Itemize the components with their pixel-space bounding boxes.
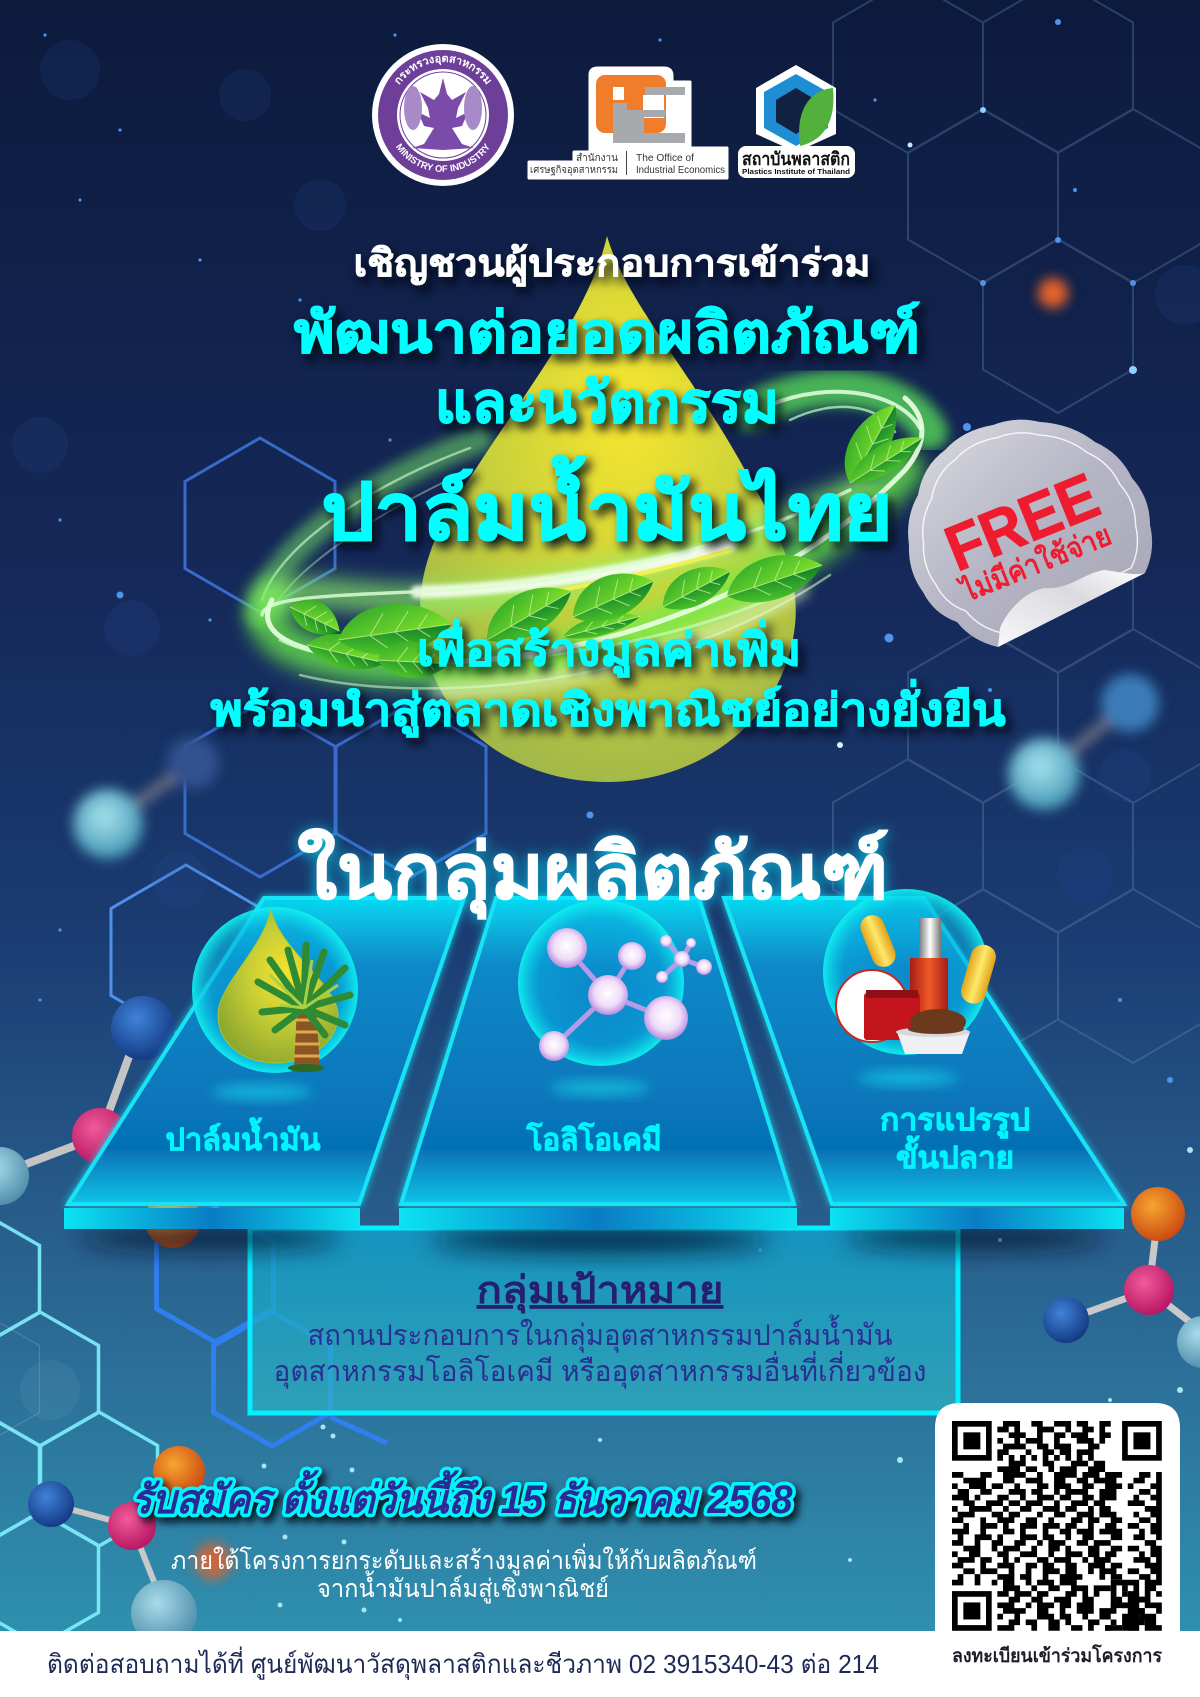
molecule left: [0, 996, 201, 1248]
QR caption: ลงทะเบียนเข้าร่วมโครงการ: [952, 1644, 1163, 1667]
title text: ปาล์มน้ำมันไทย: [322, 455, 892, 556]
label: end products: [880, 1104, 1030, 1175]
logo: Plastics Institute of Thailand: สถาบันพลาสติก: [742, 149, 850, 169]
QR code card: [935, 1403, 1180, 1631]
panel shadows: [80, 1228, 1105, 1252]
bubble: [823, 889, 989, 1055]
title text: พร้อมนำสู่ตลาดเชิงพาณิชย์อย่างยั่งยืน: [210, 679, 1005, 737]
green swirl front bands: [262, 398, 922, 690]
logo: Ministry of Industry: กระทรวงอุตสาหกรรม: [395, 56, 492, 85]
bubble: [518, 900, 684, 1066]
project note: ภายใต้โครงการยกระดับและสร้างมูลค่าเพิ่มให้กับผลิตภัณฑ์: [171, 1543, 757, 1576]
molecule right: [1043, 1187, 1200, 1368]
panel: end products: [724, 889, 1124, 1229]
product group heading: ในกลุ่มผลิตภัณฑ์: [298, 828, 888, 920]
target group heading: กลุ่มเป้าหมาย: [476, 1270, 724, 1314]
QR code: [952, 1424, 1162, 1628]
footer bar: [0, 1631, 1200, 1697]
label: end products: การแปรรูป: [880, 1104, 1030, 1139]
registration date: รับสมัคร ตั้งแต่วันนี้ถึง 15 ธันวาคม 2568: [132, 1469, 793, 1522]
logo: Ministry of Industry: MINISTRY OF INDUSTRY: [396, 142, 489, 172]
title text: [210, 243, 1005, 737]
logo: Office of Industrial Economics: สำนักงาน: [576, 153, 618, 164]
title text: และนวัตกรรม: [435, 371, 779, 434]
FREE badge: [908, 420, 1152, 647]
panel: palm oil: [64, 898, 464, 1229]
logo: Office of Industrial Economics: The Office of: [636, 153, 694, 164]
target group panel: [250, 1228, 958, 1413]
leaves: [284, 394, 928, 679]
molecule bottom left: [28, 1446, 205, 1646]
label: oleochemical: โอลิโอเคมี: [526, 1121, 662, 1157]
blurred molecules upper area: [73, 278, 1159, 1579]
logo: Office of Industrial Economics: Industrial Economics: [636, 165, 725, 176]
panel: oleochemical: [399, 898, 797, 1229]
logo: Plastics Institute of Thailand: [738, 65, 855, 178]
logo: Ministry of Industry: [372, 44, 514, 186]
logo: Plastics Institute of Thailand: Plastics Institute of Thailand: [742, 169, 850, 176]
project note: จากน้ำมันปาล์มสู่เชิงพาณิชย์: [317, 1570, 609, 1604]
FREE badge: FREE: [935, 459, 1109, 585]
FREE badge: ไม่มีค่าใช้จ่าย: [954, 518, 1116, 610]
title text: เชิญชวนผู้ประกอบการเข้าร่วม: [354, 243, 870, 287]
title text: เพื่อสร้างมูลค่าเพิ่ม: [417, 619, 801, 677]
icon: molecule: [539, 928, 712, 1061]
target group description: อุตสาหกรรมโอลิโอเคมี หรืออุตสาหกรรมอื่นที่เกี่ยวข้อง: [274, 1351, 926, 1389]
title text: พัฒนาต่อยอดผลิตภัณฑ์: [294, 301, 920, 364]
swirl rear bands: [258, 388, 930, 615]
bubble: [192, 907, 358, 1073]
label: end products: ขั้นปลาย: [896, 1135, 1014, 1175]
contact text: ติดต่อสอบถามได้ที่ ศูนย์พัฒนาวัสดุพลาสติกและชีวภาพ 02 3915340-43 ต่อ 214: [47, 1646, 879, 1680]
icon: oil drop with palm tree: [218, 910, 350, 1072]
logo: Office of Industrial Economics: [529, 68, 727, 178]
project note: [171, 1543, 757, 1604]
target group description: สถานประกอบการในกลุ่มอุตสาหกรรมปาล์มน้ำมัน: [308, 1314, 893, 1353]
logo: Office of Industrial Economics: เศรษฐกิจอุตสาหกรรม: [530, 165, 618, 176]
icon: consumer products: [836, 911, 999, 1054]
target group description: [274, 1314, 926, 1389]
label: palm oil: ปาล์มน้ำมัน: [166, 1117, 321, 1157]
oil drop: [420, 236, 796, 782]
